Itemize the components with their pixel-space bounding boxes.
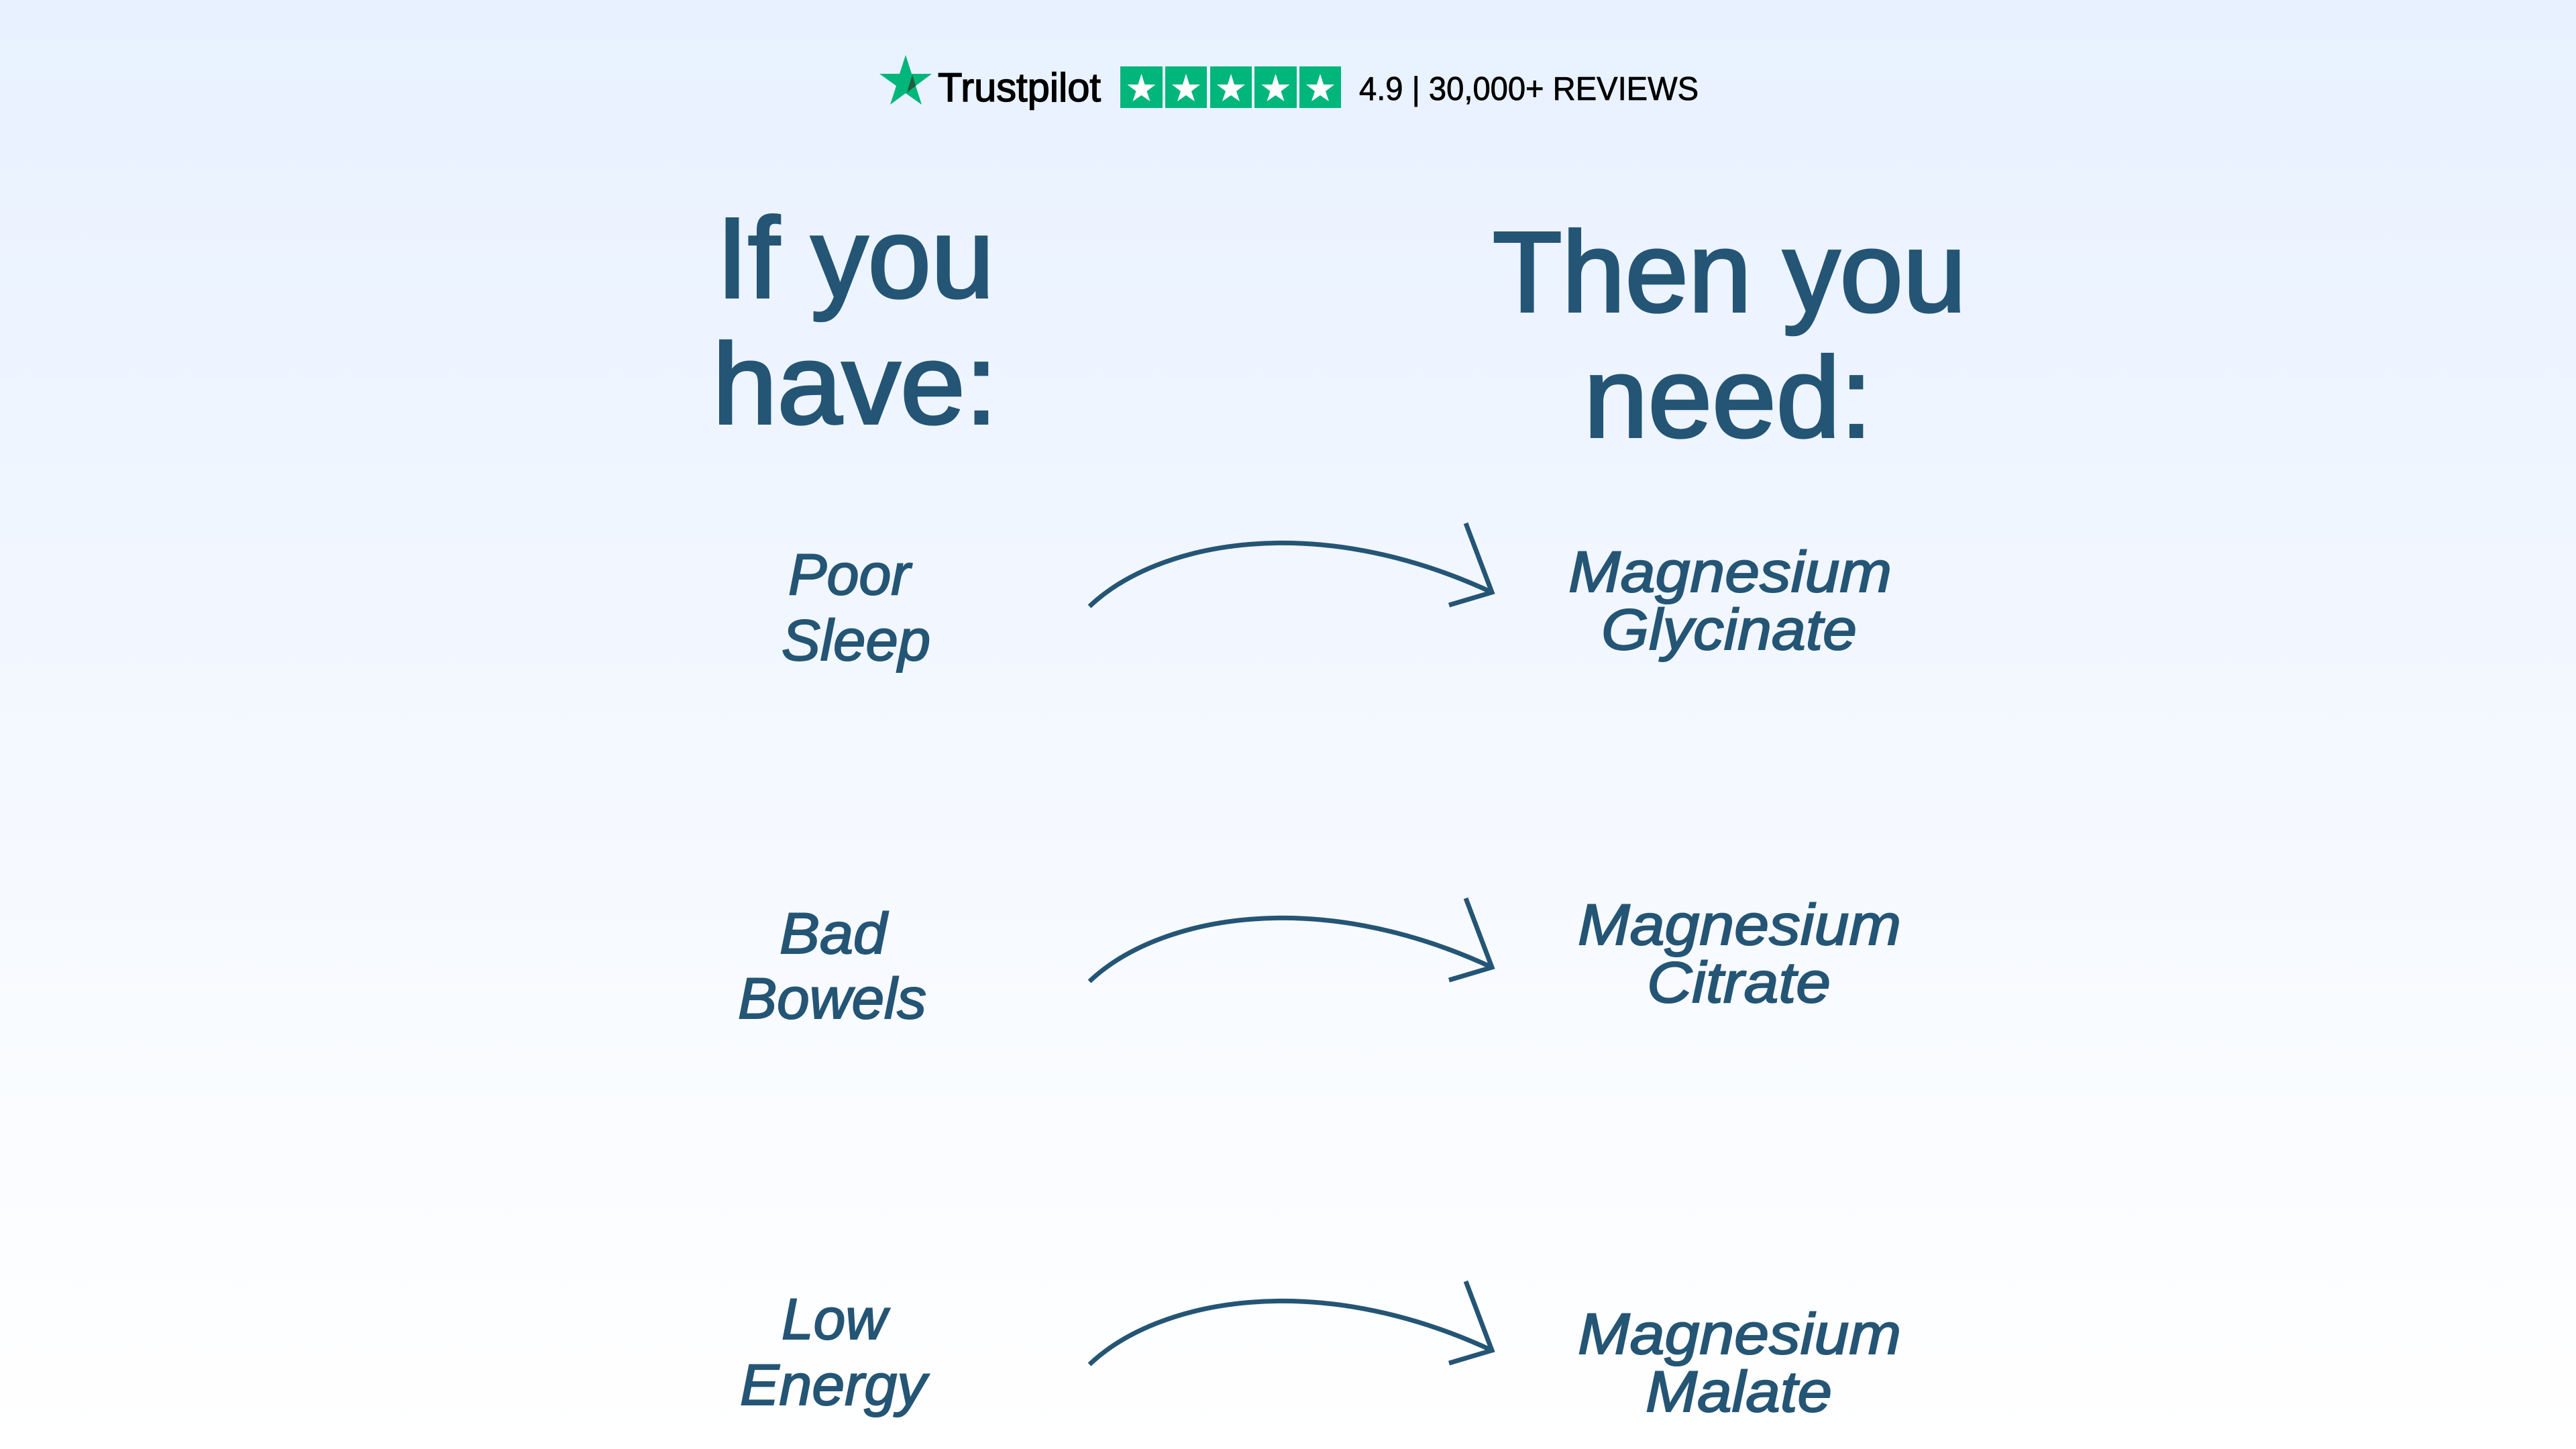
heading: then you need: Then you — [1493, 209, 1966, 336]
heading: then you need — [1493, 209, 1966, 462]
symptom: low energy: Low — [782, 1287, 890, 1352]
symptom: bad bowels: Bad — [780, 902, 889, 966]
arrow: bad bowels to citrate — [1089, 898, 1492, 981]
symptom: poor sleep — [782, 543, 930, 673]
arrow: low energy to malate — [1089, 1281, 1492, 1364]
heading: if you have: have: — [712, 321, 998, 448]
trustpilot wordmark: Trustpilot — [938, 65, 1101, 110]
remedy: magnesium citrate: Magnesium — [1578, 893, 1901, 957]
remedy: magnesium citrate: Citrate — [1647, 951, 1831, 1015]
heading: if you have — [712, 195, 998, 448]
heading: if you have: If you — [716, 195, 994, 322]
heading: then you need: need: — [1584, 334, 1872, 462]
symptom: bad bowels — [738, 902, 926, 1031]
symptom: low energy — [740, 1287, 930, 1417]
trustpilot rating bar — [879, 55, 1699, 110]
remedy: magnesium glycinate: Glycinate — [1601, 598, 1857, 662]
remedy: magnesium glycinate — [1568, 540, 1892, 662]
remedy: magnesium malate — [1578, 1302, 1901, 1424]
remedy: magnesium malate: Magnesium — [1578, 1302, 1901, 1366]
icon: trustpilot star — [879, 55, 932, 105]
rating text: 4.9 | 30,000+ REVIEWS — [1359, 71, 1699, 107]
remedy: magnesium glycinate: Magnesium — [1568, 540, 1892, 604]
symptom: low energy: Energy — [740, 1353, 930, 1417]
remedy: magnesium malate: Malate — [1646, 1360, 1832, 1424]
symptom: poor sleep: Sleep — [782, 608, 930, 673]
symptom: poor sleep: Poor — [788, 543, 912, 607]
symptom: bad bowels: Bowels — [738, 967, 926, 1031]
five star rating boxes — [1120, 66, 1341, 108]
remedy: magnesium citrate — [1578, 893, 1901, 1015]
arrow: poor sleep to glycinate — [1089, 523, 1492, 606]
